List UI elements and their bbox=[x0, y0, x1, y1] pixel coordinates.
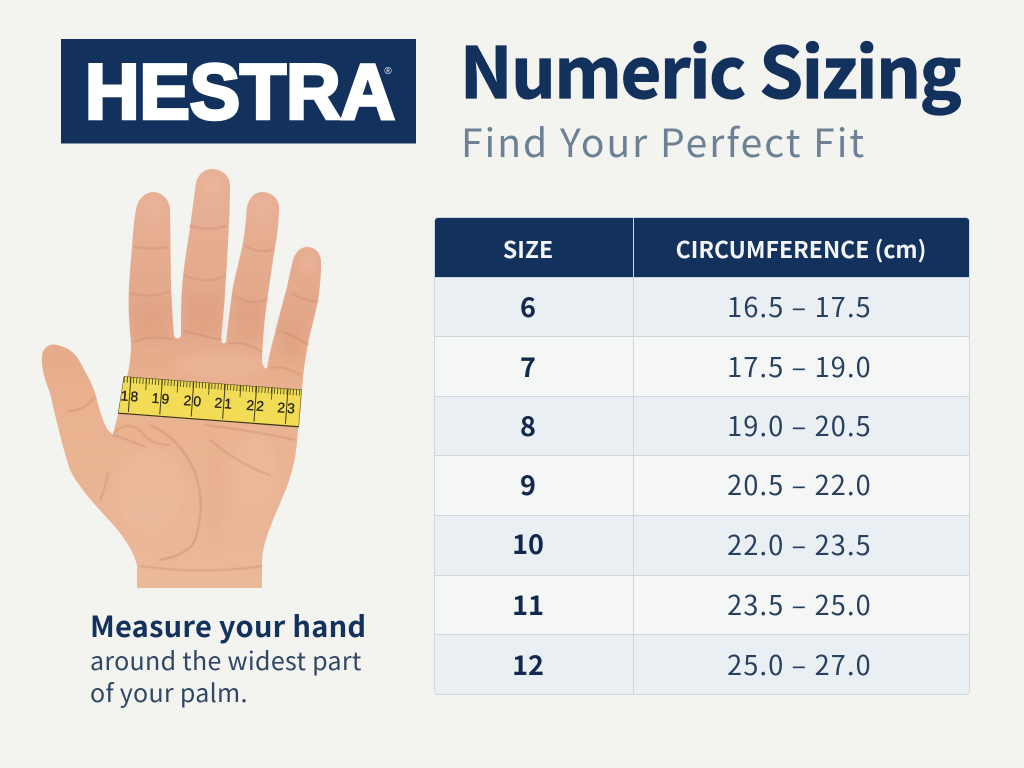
tape numbers bbox=[120, 387, 297, 417]
row size 11: 11 bbox=[512, 584, 544, 622]
row size 8: 8 bbox=[520, 404, 536, 444]
row size 12 bbox=[435, 634, 969, 694]
row size 10: 22.0 – 23.5 bbox=[727, 524, 872, 563]
row size 12: 12 bbox=[512, 644, 544, 683]
tape numbers: 19 bbox=[151, 390, 172, 407]
row size 9 bbox=[435, 455, 969, 515]
caption: measure your hand bbox=[90, 604, 366, 710]
row size 6: 6 bbox=[520, 286, 536, 324]
table header: CIRCUMFERENCE (cm) bbox=[676, 230, 926, 264]
caption body bbox=[90, 642, 362, 710]
tape numbers: 22 bbox=[246, 397, 267, 414]
finger shading bbox=[134, 290, 304, 550]
row size 10 bbox=[435, 515, 969, 575]
row size 11: 23.5 – 25.0 bbox=[727, 584, 872, 622]
subtitle: Find Your Perfect Fit bbox=[461, 113, 866, 169]
hand shape bbox=[42, 169, 321, 588]
row size 9: 20.5 – 22.0 bbox=[727, 464, 872, 503]
caption body: of your palm. bbox=[90, 674, 248, 710]
logo: HESTRA: HESTRA bbox=[85, 48, 395, 136]
row size 7 bbox=[435, 336, 969, 396]
row size 8 bbox=[435, 396, 969, 455]
fingertip highlights bbox=[115, 175, 315, 532]
title: Numeric Sizing bbox=[460, 18, 960, 119]
row size 12: 25.0 – 27.0 bbox=[727, 644, 872, 683]
tape numbers: 18 bbox=[120, 387, 141, 405]
table header bbox=[435, 218, 969, 277]
size table bbox=[435, 218, 969, 694]
logo: HESTRA: ® bbox=[384, 66, 392, 77]
caption body: around the widest part bbox=[90, 642, 362, 678]
column divider bbox=[633, 218, 634, 694]
row size 8: 19.0 – 20.5 bbox=[727, 404, 872, 444]
minor ticks bbox=[124, 379, 301, 393]
row size 9: 9 bbox=[520, 464, 536, 503]
tape numbers: 23 bbox=[277, 399, 297, 417]
row size 11 bbox=[435, 575, 969, 634]
table header: SIZE bbox=[503, 230, 553, 264]
illustration: hand with measuring tape bbox=[42, 169, 321, 588]
tape numbers: 21 bbox=[214, 394, 235, 412]
major ticks bbox=[128, 377, 288, 424]
tape numbers: 20 bbox=[183, 392, 204, 409]
row size 6: 16.5 – 17.5 bbox=[727, 286, 872, 324]
row size 7: 7 bbox=[520, 346, 536, 385]
row size 10: 10 bbox=[512, 523, 544, 562]
measuring tape bbox=[118, 376, 301, 427]
creases bbox=[68, 226, 318, 570]
row size 7: 17.5 – 19.0 bbox=[727, 346, 872, 385]
caption heading: Measure your hand bbox=[90, 604, 366, 646]
row size 6 bbox=[435, 277, 969, 336]
